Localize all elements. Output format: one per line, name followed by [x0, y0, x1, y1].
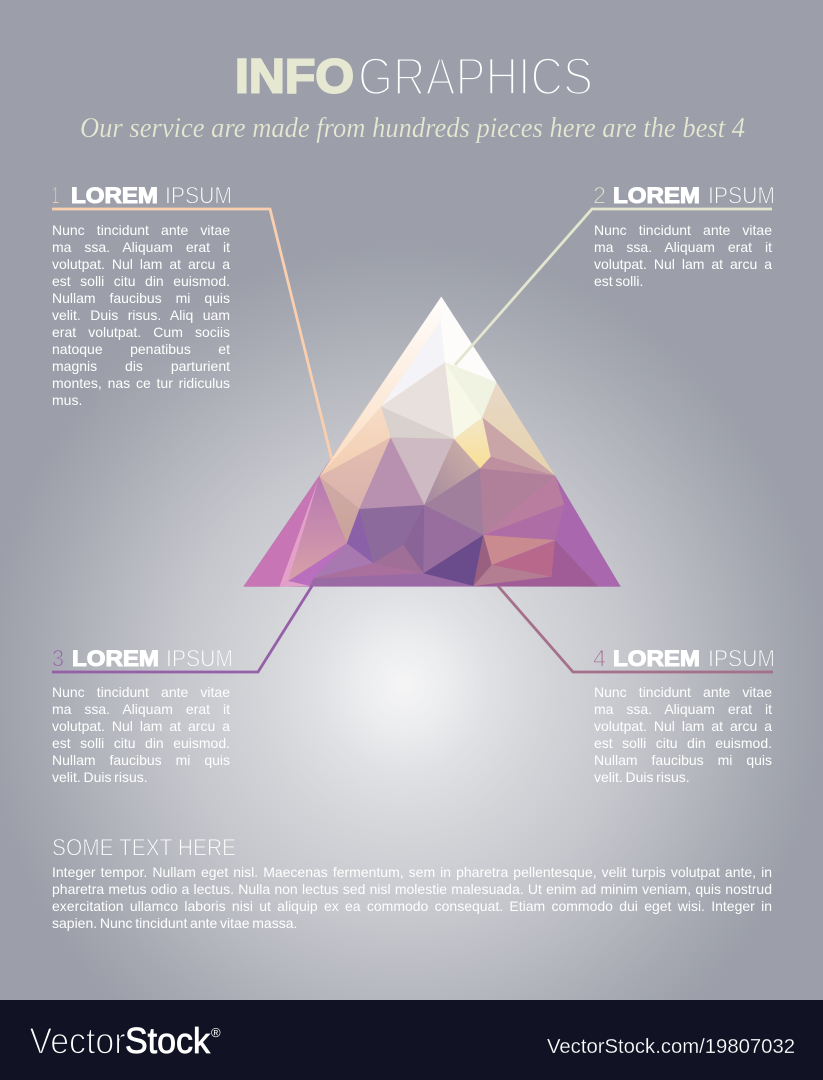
VectorStock id: VectorStock.com/19807032	[547, 1035, 795, 1058]
bottom paragraph: Integer tempor. Nullam eget nisl. Maecenas fermentum, sem in pharetra pellentesque, velit turpis volutpat ante, in	[52, 864, 772, 880]
connector line 4	[498, 586, 773, 672]
text block 1: Nullam faucibus mi quis	[52, 290, 230, 306]
footer bar	[0, 1000, 823, 1080]
bottom paragraph: sapien. Nunc tincidunt ante vitae massa.	[52, 915, 297, 931]
text block 1	[52, 222, 230, 408]
title: INFO	[235, 50, 354, 104]
title	[235, 47, 593, 106]
text block 3: volutpat. Nul lam at arcu a	[52, 718, 230, 734]
text block 2: est solli.	[594, 273, 643, 289]
text block 1: erat volutpat. Cum sociis	[52, 324, 230, 340]
text block 1: volutpat. Nul lam at arcu a	[52, 256, 230, 272]
heading 1: LOREM	[71, 183, 158, 208]
connector line 1	[52, 209, 332, 460]
heading 2	[593, 182, 775, 209]
subtitle: Our service are made from hundreds pieces here are the best 4	[80, 112, 745, 144]
heading 1	[52, 182, 232, 209]
text block 4: volutpat. Nul lam at arcu a	[594, 718, 772, 734]
bottom heading: SOME TEXT HERE	[52, 834, 236, 861]
text block 1: velit. Duis risus. Aliq uam	[52, 307, 230, 323]
text block 2: Nunc tincidunt ante vitae	[594, 222, 772, 238]
heading 3: LOREM	[72, 646, 159, 671]
bottom paragraph	[52, 864, 772, 931]
heading 4: IPSUM	[708, 645, 775, 672]
heading 4	[593, 645, 775, 672]
text block 4: velit. Duis risus.	[594, 769, 690, 785]
text block 2: ma ssa. Aliquam erat it	[594, 239, 772, 255]
bottom paragraph: pharetra metus odio a lectus. Nulla non lectus sed nisl molestie malesuada. Ut enim ad minim veniam, quis nostrud	[52, 881, 772, 897]
text block 3: est solli citu din euismod.	[52, 735, 230, 751]
text block 3	[52, 684, 230, 785]
text block 1: mus.	[52, 392, 82, 408]
heading 2: 2	[593, 182, 606, 209]
title: GRAPHICS	[358, 47, 593, 106]
connector line 3	[52, 586, 312, 672]
bottom paragraph: exercitation ullamco laboris nisi ut aliquip ex ea commodo consequat. Etiam commodo dui eget wisi. Integer in	[52, 898, 772, 914]
heading 1: IPSUM	[165, 182, 232, 209]
text block 1: Nunc tincidunt ante vitae	[52, 222, 230, 238]
heading 3: 3	[52, 645, 64, 672]
heading 1: 1	[52, 182, 60, 209]
text block 1: est solli citu din euismod.	[52, 273, 230, 289]
text block 4: ma ssa. Aliquam erat it	[594, 701, 772, 717]
heading 2: IPSUM	[708, 182, 775, 209]
VectorStock logo	[30, 1020, 221, 1062]
text block 4: est solli citu din euismod.	[594, 735, 772, 751]
text block 4: Nullam faucibus mi quis	[594, 752, 772, 768]
text block 2	[594, 222, 772, 289]
polygon triangle	[243, 297, 621, 587]
text block 1: montes, nas ce tur ridiculus	[52, 375, 230, 391]
text block 4: Nunc tincidunt ante vitae	[594, 684, 772, 700]
text block 2: volutpat. Nul lam at arcu a	[594, 256, 772, 272]
heading 3	[52, 645, 233, 672]
heading 2: LOREM	[613, 183, 700, 208]
heading 4: LOREM	[613, 646, 700, 671]
text block 3: Nullam faucibus mi quis	[52, 752, 230, 768]
text block 3: ma ssa. Aliquam erat it	[52, 701, 230, 717]
text block 4	[594, 684, 772, 785]
heading 3: IPSUM	[166, 645, 233, 672]
text block 3: Nunc tincidunt ante vitae	[52, 684, 230, 700]
text block 3: velit. Duis risus.	[52, 769, 148, 785]
connector line 2	[455, 209, 772, 365]
text block 1: ma ssa. Aliquam erat it	[52, 239, 230, 255]
text block 1: magnis dis parturient	[52, 358, 230, 374]
VectorStock logo: ®	[211, 1025, 221, 1040]
VectorStock logo: Stock	[125, 1020, 211, 1061]
VectorStock logo: Vector	[30, 1020, 126, 1062]
text block 1: natoque penatibus et	[52, 341, 230, 357]
heading 4: 4	[593, 645, 606, 672]
